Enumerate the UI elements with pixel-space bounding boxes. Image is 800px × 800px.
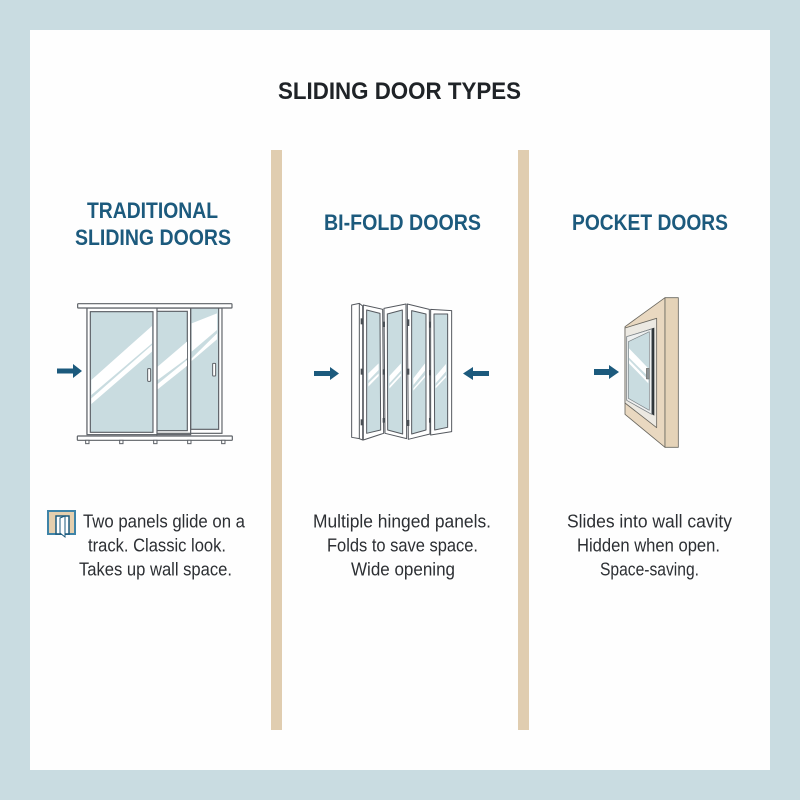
icon: door xyxy=(48,511,75,537)
text: pocket description: Slides into wall cavity xyxy=(567,510,733,532)
divider left xyxy=(271,150,282,730)
text: traditional description: track. Classic look. xyxy=(88,534,226,556)
panel: bi-fold doors xyxy=(313,210,491,580)
arrow: pocket xyxy=(594,365,619,379)
text: bi-fold description xyxy=(313,510,491,580)
text: pocket description: Space-saving. xyxy=(600,558,699,580)
arrow: bi-fold left xyxy=(314,367,339,380)
illustration: sliding door xyxy=(77,304,232,444)
panel: traditional sliding doors xyxy=(48,198,246,580)
text: traditional description: Takes up wall space. xyxy=(79,558,232,580)
text: pocket description xyxy=(567,510,733,580)
illustration: pocket door xyxy=(625,298,678,447)
heading: traditional sliding doors: SLIDING DOORS xyxy=(75,225,231,250)
heading: traditional sliding doors xyxy=(75,198,231,250)
heading: pocket doors: POCKET DOORS xyxy=(572,210,728,235)
text: traditional description: Two panels glide on a xyxy=(83,510,246,532)
title: SLIDING DOOR TYPES xyxy=(278,78,521,105)
text: pocket description: Hidden when open. xyxy=(577,534,720,556)
heading: bi-fold doors: BI-FOLD DOORS xyxy=(324,210,481,235)
arrow: bi-fold right xyxy=(463,367,489,380)
heading: traditional sliding doors: TRADITIONAL xyxy=(87,198,218,223)
text: bi-fold description: Wide opening xyxy=(351,558,455,580)
text: bi-fold description: Folds to save space. xyxy=(327,534,478,556)
text: traditional description xyxy=(79,510,246,580)
illustration: bi-fold door xyxy=(352,303,452,440)
text: bi-fold description: Multiple hinged panels. xyxy=(313,510,491,532)
arrow: traditional xyxy=(57,364,82,378)
panel: pocket doors xyxy=(567,210,733,580)
divider right xyxy=(518,150,529,730)
